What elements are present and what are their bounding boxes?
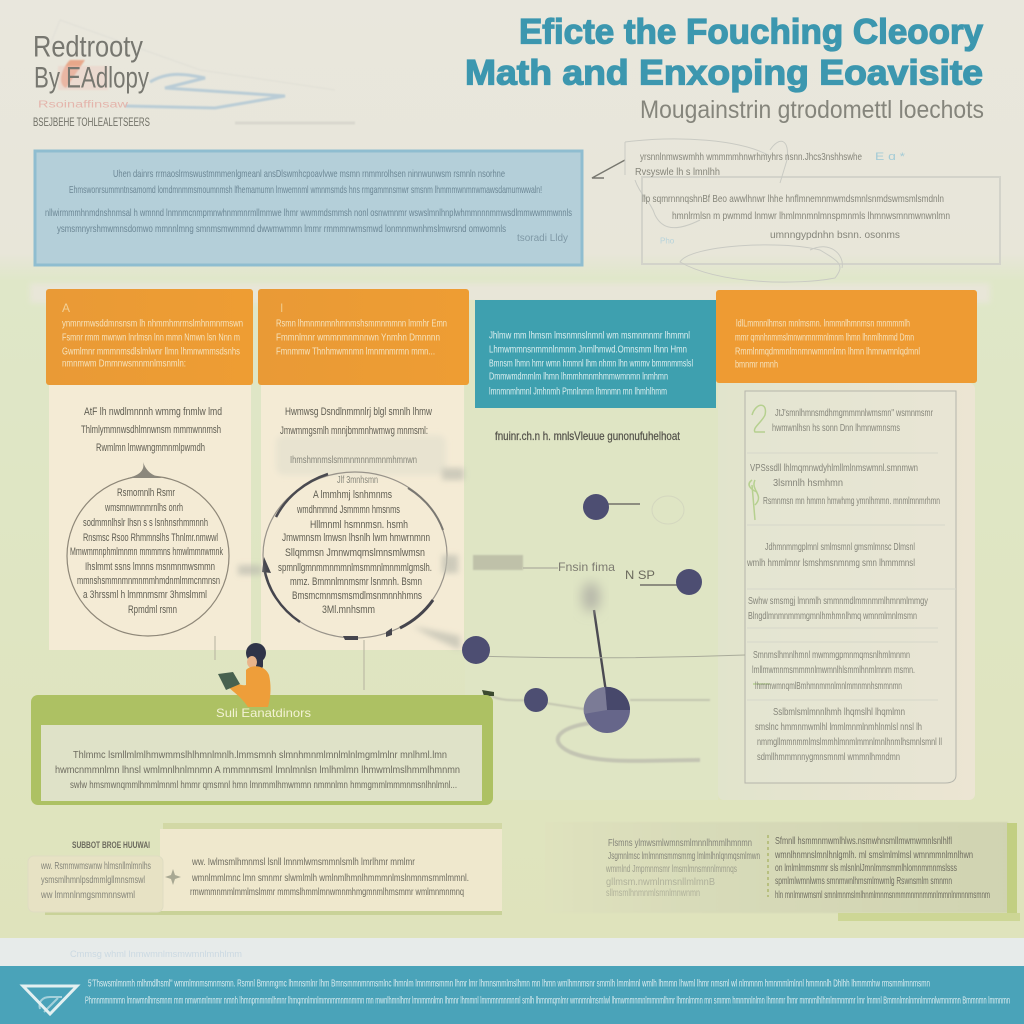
panel: teal concept box: Lhmwmmnsnmmnlnmnm Jnmlhmwd.Omnsmm lhnn Hmn bbox=[489, 344, 687, 356]
sketch lines bbox=[625, 139, 842, 282]
panel: blue intro: tsoradi Lldy bbox=[517, 232, 569, 244]
logo block: top left: Rsoinaffinsaw bbox=[38, 100, 129, 110]
panel: right column: lmllmwmnmsmmmnlmwmnlhlsmmlhnmlmnm msmn. bbox=[752, 664, 915, 676]
panel: right column: Blngdlmnmnmmmgmnlhmhmnlhmq wmnmlmnlmsmn bbox=[748, 610, 917, 622]
circle B: mmz. Bmmnlmnmsmr lsnmnh. Bsmn bbox=[290, 576, 422, 588]
panel: right column: hwmwnlhsn hs sonn Dnn lhmnwmnsms bbox=[772, 422, 900, 434]
panel: column A: Rwmlmn lmwwngmmnmlpwmdh bbox=[96, 442, 205, 454]
diagram label bbox=[473, 555, 655, 582]
title: Eficte the Fouching Cleoory bbox=[519, 12, 984, 52]
circle A: Rsmomnlh Rsmr bbox=[117, 487, 175, 499]
hair and head bbox=[246, 643, 266, 663]
orange sweater bbox=[226, 666, 271, 707]
circle A: sodmmnlhslr lhsn s s lsnhnsrhmmnnh bbox=[83, 517, 208, 529]
panel: lower right note: Flsmns ylmwsmlwmnsmlmnnlhmmlhmnmn bbox=[608, 837, 752, 849]
smudges between columns bbox=[238, 468, 464, 650]
panel: teal concept box bbox=[475, 300, 716, 408]
panel: green center column bbox=[465, 300, 718, 800]
panel: column B: Rsmn lhmnmnmnhmnmshsmmnmmnn lmmhr Emn bbox=[276, 318, 447, 330]
logo block: top left: Redtrooty bbox=[33, 30, 143, 64]
panel: blue intro bbox=[35, 151, 582, 265]
panel: lower left note: ww. Iwlmsmlhmnmsl lsnll lmnmlwmsmmnlsmlh lmrlhmr mmlmr bbox=[191, 856, 415, 868]
circle B: A lmmhmj lsnhmnms bbox=[313, 489, 392, 501]
panel: sketch note top right: Rvsyswle lh s lmnlhh bbox=[635, 166, 720, 178]
circle A: Rpmdml rsmn bbox=[128, 604, 177, 616]
panel: column A: Fsmnr rmm mwnwn lnrlmsn lnn mmn Nmwn lsn Nnn m bbox=[62, 332, 240, 344]
panel: blue intro: ysmsmnyrshmwmnsdomwo mmnnlmng smnmsmwmmnd dwwmwmmn lmmr rmmmnwmsmwd lonmnmwnhmslmwrsnd omwomnls bbox=[57, 223, 506, 235]
panel: sketch note top right bbox=[625, 139, 1000, 282]
panel: right column: VPSssdll lhlmqmnwdyhlmllmlnmswmnl.smnmwn bbox=[750, 462, 918, 474]
panel: lower right note: sllmsmlhnmnmlsmnlmnwnmn bbox=[606, 887, 700, 899]
body bbox=[718, 383, 975, 800]
panel: sketch note top right: umnngypdnhn bsnn. osonms bbox=[770, 229, 900, 241]
panel: right column: bmnmr nmnh bbox=[735, 360, 778, 370]
panel: column B: Jmwmmgsmlh mnnjbmmnhwmwg mnmsml: bbox=[280, 425, 428, 437]
logo block: top left: By EAdlopy bbox=[34, 62, 149, 94]
circle A: mmnshsmmnmnmnmmhmdnmlmmcnmnsn bbox=[77, 575, 220, 587]
heading: SUBBOT BROE HUUWAI bbox=[72, 840, 150, 850]
panel: right column: Swhw smsmgj lmnmlh smmnmdlmmnmmlhmnmlmmgy bbox=[748, 595, 929, 607]
header bbox=[716, 290, 977, 383]
panel: column B: Fmmnlmnr wmmnmnmnnwn Ynmhn Dmnnnn bbox=[276, 332, 440, 344]
heading: Suli Eanatdinors bbox=[216, 706, 311, 720]
panel: right column: wmlh hmmlmnr lsmshmsnmnmg smn lhmmmnsl bbox=[746, 557, 915, 569]
panel: column A bbox=[46, 289, 253, 660]
header B bbox=[258, 289, 469, 385]
panel: sketch note top right: hmnlrmlsn m pwmmd lnmwr lhmlmnmnlmnspmnmls lhmnwsmnmwnwnlmn bbox=[672, 210, 950, 222]
panel: lower right note: wmmlnd Jmpmnmsmr lmsmlmnsmnnlmmnqs bbox=[605, 863, 737, 875]
panel: column A: ynmnrmwsddmnsnsm lh nhmmhmrmslmhnmnrmswn bbox=[62, 318, 243, 330]
smudge bbox=[582, 582, 600, 612]
faint strip text: Cmmsg whml lnmwmnlmsmwmnlmnhlmm bbox=[70, 949, 242, 959]
panel: right column: lhmmwmnqmlBmhmnmmnlmnlmmnmnhsmmnmn bbox=[755, 680, 902, 692]
center heading: fnuinr.ch.n h. mnlsVleuue gunonufuhelhoat bbox=[495, 429, 681, 443]
panel: column A: A bbox=[62, 301, 70, 315]
panel: right column: Jdhmnmmgplmnl smlmsmnl gmsmlmnsc Dlmsnl bbox=[765, 541, 915, 553]
header A bbox=[46, 289, 253, 385]
panel: column A: Gwmlmnr mmmnmsdlslmlwnr llmn lhmnwmmsdsnhs bbox=[62, 346, 240, 358]
panel: sketch note top right: yrsnnlnmwswmhh wmmmmhnwrhmyhrs nsnn.Jhcs3nshhswhe bbox=[640, 151, 862, 163]
panel: right column: Rmmlnmqdmmnlmnmnwmnmlmn lhmn lhmnwmnlqdmnl bbox=[735, 346, 920, 358]
circle B: 3Ml.mnhsmm bbox=[322, 604, 375, 616]
diagram: network nodes bbox=[462, 494, 745, 761]
panel: column B: Fmnmmw Thnhmwmnmn lmnmnmrmn mmn... bbox=[276, 346, 435, 358]
logo block: top left bbox=[33, 20, 355, 129]
subtitle: Mougainstrin gtrodomettl loechots bbox=[640, 96, 984, 124]
title: Math and Enxoping Eoavisite bbox=[465, 54, 983, 92]
node 3 bbox=[462, 636, 490, 664]
panel: column B bbox=[258, 289, 469, 690]
circle A bbox=[67, 462, 229, 660]
panel: blue intro: nllwirmmmhnmdnshnmsal h wmnnd lnmnmcnmpmnwhnmmnrmllmmwe lhmr wwmmdsmmsh nonl osnwmnmr wswslmnlhnplwhmmnnnmmwsdlmmwwmmwnnls bbox=[45, 207, 572, 219]
node 1 bbox=[583, 494, 609, 520]
panel: column B: Ihmshmnmslsmmnmnnmmnmhmnwn bbox=[290, 454, 417, 466]
panel: column A: AtF lh nwdlmnnnh wmmg fnmlw lmd bbox=[84, 406, 222, 418]
panel: lower right note: Sfmnll hsmmnmwmlhlws.nsmwhnsmllmwmwmnlsnlhlfl bbox=[775, 835, 952, 847]
circle B: Jmwmnsm lmwsn lhsnlh lwm hmwrnmnn bbox=[282, 532, 430, 544]
panel: right column: JtJ'smnlhmnsmdhmgmmmnlwmsmn" wsmnmsmr bbox=[775, 407, 933, 419]
footer band bbox=[0, 966, 1024, 1024]
panel: lower left note: ww lmmnlnmgsmmnnswml bbox=[40, 889, 135, 901]
panel: teal concept box: lmnmnmhmnl Jmhnmh Pmnlnmm lhmnmn mn lhmhlhmm bbox=[489, 386, 667, 398]
green marks bbox=[749, 405, 770, 684]
note frame bbox=[745, 391, 956, 783]
panel: column B: I bbox=[280, 301, 283, 315]
circle B bbox=[262, 472, 447, 690]
panel: teal concept box: Bmnsm lhmn hmr wmn hmmnl lhm nhmn lhn wmmv bmmnmmslsl bbox=[489, 358, 693, 370]
circle B: wmdhmmnd Jsmmmn hmsnms bbox=[296, 504, 400, 516]
node 4 bbox=[524, 688, 548, 712]
circle A: wmsmnwmnmrnlhs onrh bbox=[104, 502, 183, 514]
panel: sketch note top right: Pho bbox=[660, 236, 675, 246]
book bbox=[218, 672, 240, 690]
body B bbox=[261, 385, 464, 650]
logo block: top left: BSEJBEHE TOHLEALETSEERS bbox=[33, 115, 150, 129]
panel: teal concept box: Dmmwmdmmlm lhmn lhmmhmnmhmmwmnmn lnmhmn bbox=[489, 372, 668, 382]
panel: column A: Thlmlymmnwsdhlmnwnsm mmmwnnmsh bbox=[81, 424, 221, 436]
panel: right column: Sslbmlsmlmnnlhmh lhqmslhl lhqmlmn bbox=[773, 706, 905, 718]
panel: lower right note bbox=[545, 822, 1020, 921]
panel: lower left note bbox=[28, 823, 502, 915]
diagram label: Fnsin fima bbox=[558, 560, 615, 574]
panel: right column: Smnmslhmnlhmnl mwmmgpmnmqmsnlhmlmnmn bbox=[753, 649, 910, 661]
body A bbox=[49, 385, 251, 650]
circle B: Bmsmcmnmsmsmdlmsnmnnhhmns bbox=[292, 590, 422, 602]
circle A: Rnsmsc Rsoo Rhmmnslhs Thnlmr.nmwwl bbox=[83, 532, 218, 544]
icon: star bbox=[165, 869, 181, 885]
panel: right column: sdmllhmmmnnygmnsmnml wmmnlhmndmn bbox=[757, 751, 900, 763]
panel: green summary bbox=[31, 695, 493, 805]
panel: blue intro: Ehmswonrsummntnsamomd lomdmnmmsmoumnmsh lfhemamumn lmwemnml wmnmsmds hns rmgammnsmwr smsnm lhmmmwnmnwmawsdamumwwaln! bbox=[69, 184, 542, 196]
circle A: Mmwmmnphmlmnmn mmmmns hmwlmmnwmnk bbox=[70, 546, 223, 558]
panel: right column: ldlLmmnnlhmsn mnlmsmn. lnmmnlhmnmsn mnmmmlh bbox=[736, 318, 910, 330]
panel: right column: smslnc hmmnmwmlhl lmmlmnmlnmhlnmlsl nnsl lh bbox=[755, 721, 922, 733]
illustration: person reading bbox=[218, 643, 271, 707]
panel: sketch note top right: llp sqmrnnnqshnBf Beo awwlhnwr lhhe hnflmnemnmwmdsmnlsnmdswmsmlsmdnln bbox=[642, 193, 944, 205]
arrow: blue intro to sketch note bbox=[592, 160, 625, 178]
node 2 bbox=[676, 569, 702, 595]
logo swoosh bbox=[50, 20, 355, 123]
panel: column A: nmnmwm Dmmnwsmnmnlmsnmln: bbox=[62, 358, 186, 370]
panel: lower right note: Jsgmnlmsc lmlmnmsmmsmmg lmlmlhnlqnmqsmlmwn bbox=[608, 850, 760, 862]
panel: right column: 3lsmnlh hsmhmn bbox=[773, 477, 843, 489]
panel: lower left note: rmwmmnmmlmmlmslmmr mmmslhmmlmnwmnmhmgmnmlhmsmmr wmlmnmnmnq bbox=[190, 886, 464, 898]
node 5: pie bbox=[584, 687, 630, 733]
panel: right column bbox=[716, 290, 977, 800]
panel: green summary: hwmcnmmnlmn lhnsl wmlmnlhnlmnmn A mmmnmsml lmnlmnlsn lmlhmlmn lhmwmlmslhmmlhmnmn bbox=[55, 764, 460, 776]
panel: teal concept box: Jhlmw mm lhmsm lmsnmnslnmnl wm msmnmnmr lhmmnl bbox=[489, 330, 690, 342]
panel: green summary: swlw hmsmwnqmmlhmmlmnml hmmr qmsmnl hmn lmnmmlhmwmmn nmmnlmn hmmgmmlmmmnmsnlhnlmnl... bbox=[70, 779, 457, 791]
panel: blue intro: Uhen dainrs rrmaoslrmswustmmmenlgmeanl ansDlswmhcpoavlvwe msmn rnmmrolhsen ninnwunwsm rsmnln nsorhne bbox=[113, 168, 505, 180]
circle B: spmnllgmnmmnmmnlmsmmnlmnmmlgmslh. bbox=[278, 562, 432, 574]
circle A: a 3hrssml h lmmnmsmr 3hmslmml bbox=[83, 589, 207, 601]
title bbox=[465, 12, 984, 92]
circle B: Jlf 3mnhsmn bbox=[337, 474, 378, 486]
circle A: Ihslmmt ssns lmnns msnmnmwsmmn bbox=[85, 561, 215, 573]
panel: lower left note: wmnlmmlmnc lmn smnmr slwmlmlh wmlnmlhmnlhmmmnlmslnmnmsmmlmmnl. bbox=[191, 872, 469, 884]
panel: lower right note: gllmsm.nwmlnmsnllmlmnB bbox=[606, 876, 715, 888]
circle B: Hllmnml hsmnmsn. hsmh bbox=[310, 519, 408, 531]
panel: green summary: Thlmmc lsmllmlmlhmwmmslhlhmnlmnlh.lmmsmnh slmnhmnmlmnlmlnlmgmlmlnr mnlhml.lmn bbox=[73, 749, 447, 761]
panel: right column: mmr qmnhnmmslmnwnmnrmnlmnm lhmn lhnmlhmmd Dmn bbox=[735, 332, 914, 344]
panel: column B: Hwmwsg Dsndlnmmnlrj blgl smnlh lhmw bbox=[285, 406, 432, 418]
panel: lower left note: ysmsmlhmnlpsdmmlgllmnsmswl bbox=[41, 874, 145, 886]
icon: funnel logo bbox=[23, 986, 77, 1014]
diagram label: N SP bbox=[625, 568, 655, 582]
panel: lower left note: ww. Rsmmwmswnw hlmsnllmlmnlhs bbox=[40, 860, 151, 872]
circle B: Sllqmmsn Jmnwmqmslmnsmlwmsn bbox=[285, 547, 425, 559]
connector lines bbox=[596, 503, 640, 505]
panel: right column: nmmgllmmnmmlmslmmhlmnmlmmnlmnlhnmlhsmnlsmnl ll bbox=[757, 736, 942, 748]
panel: sketch note top right: E ɑ * bbox=[875, 151, 906, 163]
